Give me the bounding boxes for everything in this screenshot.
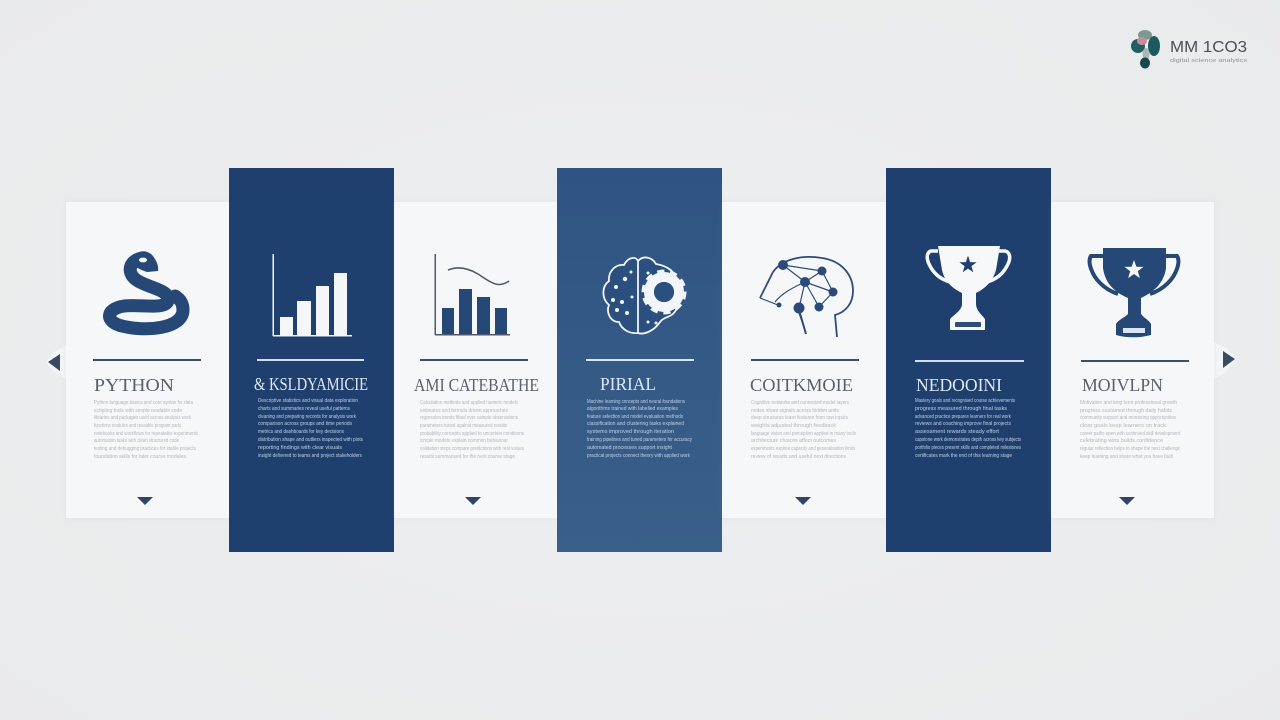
body text: progress sustained through daily habits <box>1080 408 1173 414</box>
divider rule <box>1081 360 1189 362</box>
icon: snake <box>109 251 183 329</box>
icon: bar chart <box>272 254 352 336</box>
body text <box>915 398 1021 459</box>
body text: experiments explore capacity and generalisation limits <box>751 446 855 452</box>
body text: Mastery goals and recognised course achievements <box>915 398 1015 404</box>
body text: libraries and packages used across analysis work <box>94 415 191 421</box>
body text: automated processes support insight <box>587 445 673 451</box>
body text: comparison across groups and time periods <box>258 421 352 427</box>
icon: chart with trend line <box>434 254 510 336</box>
body text: celebrating wins builds confidence <box>1080 438 1163 444</box>
body text: assessment rewards steady effort <box>915 429 1000 435</box>
divider rule <box>751 359 859 361</box>
heading: NEDOOINI <box>916 375 1002 395</box>
divider rule <box>420 359 528 361</box>
down arrow <box>137 497 153 505</box>
body text: career paths open with continued skill development <box>1080 431 1181 437</box>
panel: cognitive <box>722 202 886 518</box>
body text: validation steps compare predictions with real values <box>420 446 524 452</box>
body text: Motivation and long term professional growth <box>1080 400 1177 406</box>
body text: classification and clustering tasks explained <box>587 421 684 427</box>
body text: probability concepts applied to uncertain conditions <box>420 431 524 437</box>
body text: architecture choices affect outcomes <box>751 438 837 444</box>
heading: COITKMOIE <box>750 375 853 395</box>
body text: reviews and coaching improve final projects <box>915 421 1011 427</box>
body text: reporting findings with clear visuals <box>258 445 343 451</box>
body text: regression trends fitted over sample observations <box>420 415 518 421</box>
down arrow <box>465 497 481 505</box>
body text: training pipelines and tuned parameters for accuracy <box>587 437 692 443</box>
body text: systems improved through iteration <box>587 429 674 435</box>
body text: nodes share signals across hidden units <box>751 408 839 414</box>
body text: practical projects connect theory with applied work <box>587 453 690 459</box>
heading: AMI CATEBATHE <box>414 375 539 395</box>
body text: foundation skills for later course modules <box>94 454 186 460</box>
panel: calculation <box>394 202 557 518</box>
logo <box>1131 30 1248 68</box>
body text: functions modules and reusable program parts <box>94 423 181 429</box>
body text: deep structures learn features from raw inputs <box>751 415 848 421</box>
body text: testing and debugging practices for stable projects <box>94 446 196 452</box>
body text: notebooks and workflows for repeatable experiments <box>94 431 198 437</box>
body text: language vision and perception applied in many tools <box>751 431 856 437</box>
body text <box>420 400 524 460</box>
body text: metrics and dashboards for key decisions <box>258 429 344 435</box>
down arrow <box>1119 497 1135 505</box>
panel: primary <box>557 168 722 552</box>
body text: keep learning and share what you have built <box>1080 454 1174 460</box>
body text: review of results and useful next directions <box>751 454 846 460</box>
logo tagline: digital science analytics <box>1170 58 1248 64</box>
body text: regular reflection helps to shape the next challenge <box>1080 446 1180 452</box>
body text: automation tasks with clean structured code <box>94 438 179 444</box>
body text: progress measured through final tasks <box>915 406 1008 412</box>
body text <box>1080 400 1181 460</box>
body text: weights adjusted through feedback <box>751 423 837 429</box>
divider rule <box>915 360 1024 362</box>
icon: navy trophy <box>1090 248 1178 337</box>
heading: & KSLDYAMICIE <box>254 374 368 394</box>
body text: Machine learning concepts and neural foundations <box>587 399 685 405</box>
left navigation arrow <box>46 345 66 379</box>
divider rule <box>93 359 201 361</box>
panel: medal <box>886 168 1051 552</box>
panel: motivation <box>1051 202 1214 518</box>
body text: feature selection and model evaluation methods <box>587 414 683 420</box>
divider rule <box>257 359 364 361</box>
body text: portfolio pieces present skills and completed milestones <box>915 445 1021 451</box>
body text: Python language basics and core syntax for data <box>94 400 193 406</box>
divider rule <box>586 359 694 361</box>
body text <box>587 399 692 459</box>
body text <box>258 398 363 459</box>
panel: analytics <box>229 168 394 552</box>
body text <box>94 400 198 460</box>
body text <box>751 400 856 460</box>
body text: capstone work demonstrates depth across key subjects <box>915 437 1021 443</box>
body text: simple models explain common behaviour <box>420 438 508 444</box>
body text: Cognitive networks and connected model layers <box>751 400 849 406</box>
heading: MOIVLPN <box>1082 375 1163 395</box>
logo name: MM 1CO3 <box>1170 39 1247 56</box>
body text: scripting tools with simple readable code <box>94 408 182 414</box>
body text: community support and mentoring opportunities <box>1080 415 1176 421</box>
body text: insight delivered to teams and project stakeholders <box>258 453 362 459</box>
panel: python <box>66 202 229 518</box>
body text: charts and summaries reveal useful patterns <box>258 406 350 412</box>
body text: parameters tuned against measured results <box>420 423 507 429</box>
heading: PYTHON <box>94 375 174 395</box>
body text: estimates and formula driven approaches <box>420 408 508 414</box>
icon: brain with gear <box>603 257 684 334</box>
icon: head with network <box>760 257 853 337</box>
icon: logo mark <box>1131 30 1160 68</box>
icon: white trophy <box>927 246 1010 330</box>
body text: results summarised for the next course stage <box>420 454 515 460</box>
right navigation arrow <box>1214 342 1236 379</box>
body text: cleaning and preparing records for analysis work <box>258 414 356 420</box>
body text: certificates mark the end of this learning stage <box>915 453 1012 459</box>
down arrow <box>795 497 811 505</box>
heading: PIRIAL <box>600 374 656 394</box>
body text: Descriptive statistics and visual data exploration <box>258 398 358 404</box>
body text: Calculation methods and applied numeric models <box>420 400 518 406</box>
body text: advanced practice prepares learners for real work <box>915 414 1011 420</box>
body text: algorithms trained with labelled examples <box>587 406 678 412</box>
body text: clear goals keep learners on track <box>1080 423 1167 429</box>
body text: distribution shape and outliers inspected with plots <box>258 437 363 443</box>
